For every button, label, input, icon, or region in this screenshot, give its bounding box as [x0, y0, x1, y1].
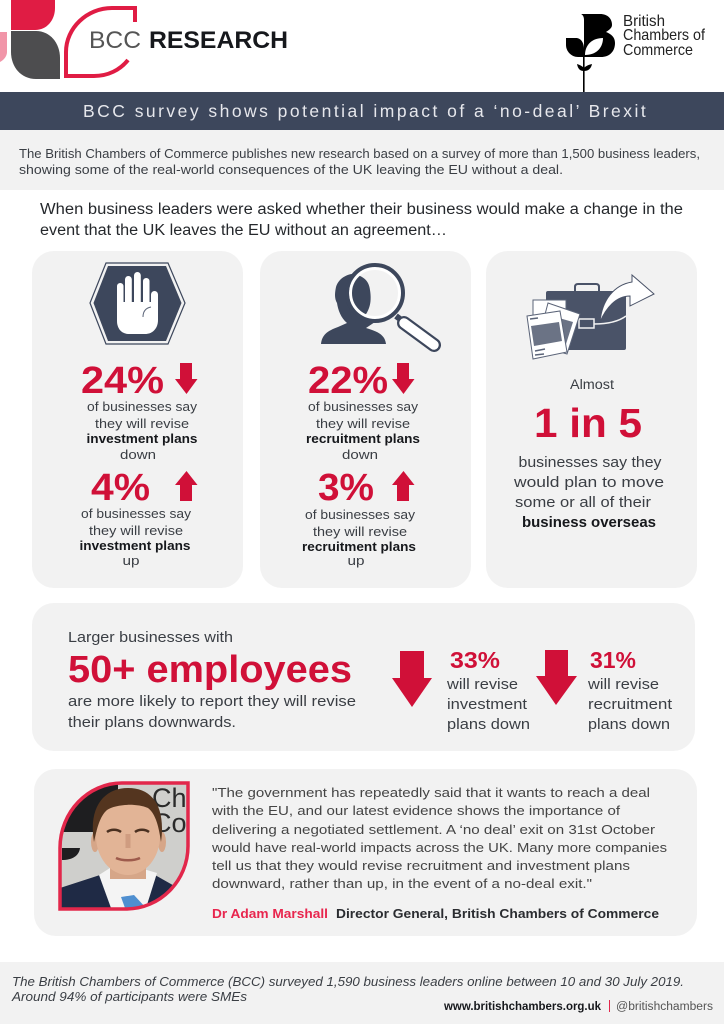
logo: British Chambers of Commerce [566, 13, 705, 92]
panel: investment plans [32, 251, 243, 588]
quote text: "The government has repeatedly said that it wants to reach a deal [212, 785, 650, 800]
website and handle [443, 1000, 713, 1013]
icon: person under magnifier [321, 265, 434, 345]
survey question text: When business leaders were asked whether their business would make a change in the [40, 201, 683, 218]
panel: larger businesses [32, 603, 695, 751]
website and handle: www.britishchambers.org.uk [443, 1001, 602, 1013]
logo: British Chambers of Commerce: Chambers of [623, 27, 705, 44]
quote attribution [212, 906, 659, 921]
logo: BCC Research: BCC [89, 27, 141, 54]
stat: 33%: 33% [450, 647, 500, 673]
logo: BCC Research: RESEARCH [149, 27, 288, 54]
stat: 22% down [306, 360, 420, 462]
stat: 1 in 5 [513, 377, 664, 531]
quote attribution: Dr Adam Marshall [212, 906, 328, 921]
intro panel: showing some of the real-world consequences of the UK leaving the EU without a deal. [19, 163, 563, 177]
stat: 22% down: recruitment plans [306, 431, 420, 446]
footer panel [0, 962, 724, 1024]
quote text: downward, rather than up, in the event of a no-deal exit." [212, 876, 592, 891]
stat: 33%: plans down [447, 716, 530, 733]
panel: quote [34, 769, 697, 936]
stat: 22% down: down [342, 447, 378, 462]
stat: 24% down [81, 360, 198, 462]
text: 50+ employees [68, 629, 356, 731]
stat: 4% up: they will revise [89, 523, 183, 538]
stat: 1 in 5: Almost [570, 377, 614, 392]
stat: 31%: plans down [588, 716, 670, 733]
text: 50+ employees: are more likely to report they will revise [68, 693, 356, 710]
stat: 24% down: down [120, 447, 156, 462]
panel: recruitment plans [260, 251, 471, 588]
footnote: Around 94% of participants were SMEs [11, 989, 248, 1004]
icon: stop hand [90, 263, 185, 344]
stat: 4% up: of businesses say [81, 506, 192, 521]
website and handle: @britishchambers [616, 1001, 713, 1013]
text: 50+ employees: 50+ employees [68, 649, 352, 691]
logo: British Chambers of Commerce: Commerce [623, 42, 693, 59]
stat: 22% down: 22% [308, 360, 388, 402]
title banner [0, 92, 724, 130]
stat: 1 in 5: 1 in 5 [534, 400, 642, 446]
footnote: The British Chambers of Commerce (BCC) surveyed 1,590 business leaders online between 10 and 30 July 2019. [12, 974, 684, 989]
stat: 31%: recruitment [588, 696, 673, 713]
quote text: with the EU, and our latest evidence shows the importance of [211, 803, 620, 818]
stat: 24% down: investment plans [86, 431, 198, 446]
stat: 1 in 5: business overseas [522, 515, 656, 531]
panel: business overseas [486, 251, 697, 588]
stat: 3% up: of businesses say [305, 507, 416, 522]
title banner: BCC survey shows potential impact of a ‘no-deal’ Brexit [83, 101, 647, 121]
stat: 31%: will revise [587, 676, 659, 693]
stat: 33%: investment [447, 696, 528, 713]
intro panel [0, 130, 724, 190]
arrow: down 31% [536, 650, 577, 705]
stat: 4% up: 4% [91, 467, 150, 509]
text: 50+ employees: their plans downwards. [68, 714, 236, 731]
stat: 24% down: of businesses say [87, 399, 198, 414]
arrow: down 33% [392, 651, 432, 707]
intro panel: The British Chambers of Commerce publishes new research based on a survey of more than 1,500 business leaders, [19, 147, 700, 161]
stat: 3% up: up [348, 553, 364, 568]
stat: 31% [587, 647, 673, 733]
stat: 3% up: 3% [318, 467, 374, 509]
stat: 22% down: they will revise [316, 416, 410, 431]
quote text: tell us that they would revise recruitment and investment plans [212, 858, 631, 873]
survey question text: event that the UK leaves the EU without an agreement… [40, 222, 447, 239]
photo: Dr Adam Marshall: Ch [152, 783, 187, 813]
stat: 1 in 5: would plan to move [513, 475, 664, 491]
stat: 3% up [302, 467, 416, 568]
stat: 22% down: of businesses say [308, 399, 419, 414]
stat: 31%: 31% [590, 647, 636, 673]
stat: 33%: will revise [446, 676, 518, 693]
text: 50+ employees: Larger businesses with [68, 629, 233, 646]
photo: Dr Adam Marshall [60, 783, 188, 910]
stat: 1 in 5: some or all of their [515, 495, 651, 511]
stat: 4% up: investment plans [80, 538, 190, 553]
logo: BCC Research [0, 0, 288, 79]
quote text [211, 785, 668, 891]
footnote [11, 974, 684, 1004]
quote text: delivering a negotiated settlement. A ‘no deal’ exit on 31st October [212, 822, 656, 837]
photo: Dr Adam Marshall: Co [152, 808, 187, 838]
survey question text [40, 201, 683, 239]
stat: 3% up: recruitment plans [302, 539, 416, 554]
stat: 1 in 5: businesses say they [518, 455, 662, 471]
quote attribution: Director General, British Chambers of Commerce [336, 906, 659, 921]
stat: 4% up: up [122, 553, 140, 568]
quote text: would have real-world impacts across the UK. Many more companies [211, 840, 668, 855]
stat: 3% up: they will revise [313, 524, 407, 539]
stat: 33% [446, 647, 530, 733]
logo: British Chambers of Commerce: British [623, 13, 665, 30]
stat: 24% down: they will revise [95, 416, 189, 431]
stat: 4% up [80, 467, 198, 568]
icon: briefcase with documents [527, 275, 654, 359]
stat: 24% down: 24% [81, 360, 164, 402]
